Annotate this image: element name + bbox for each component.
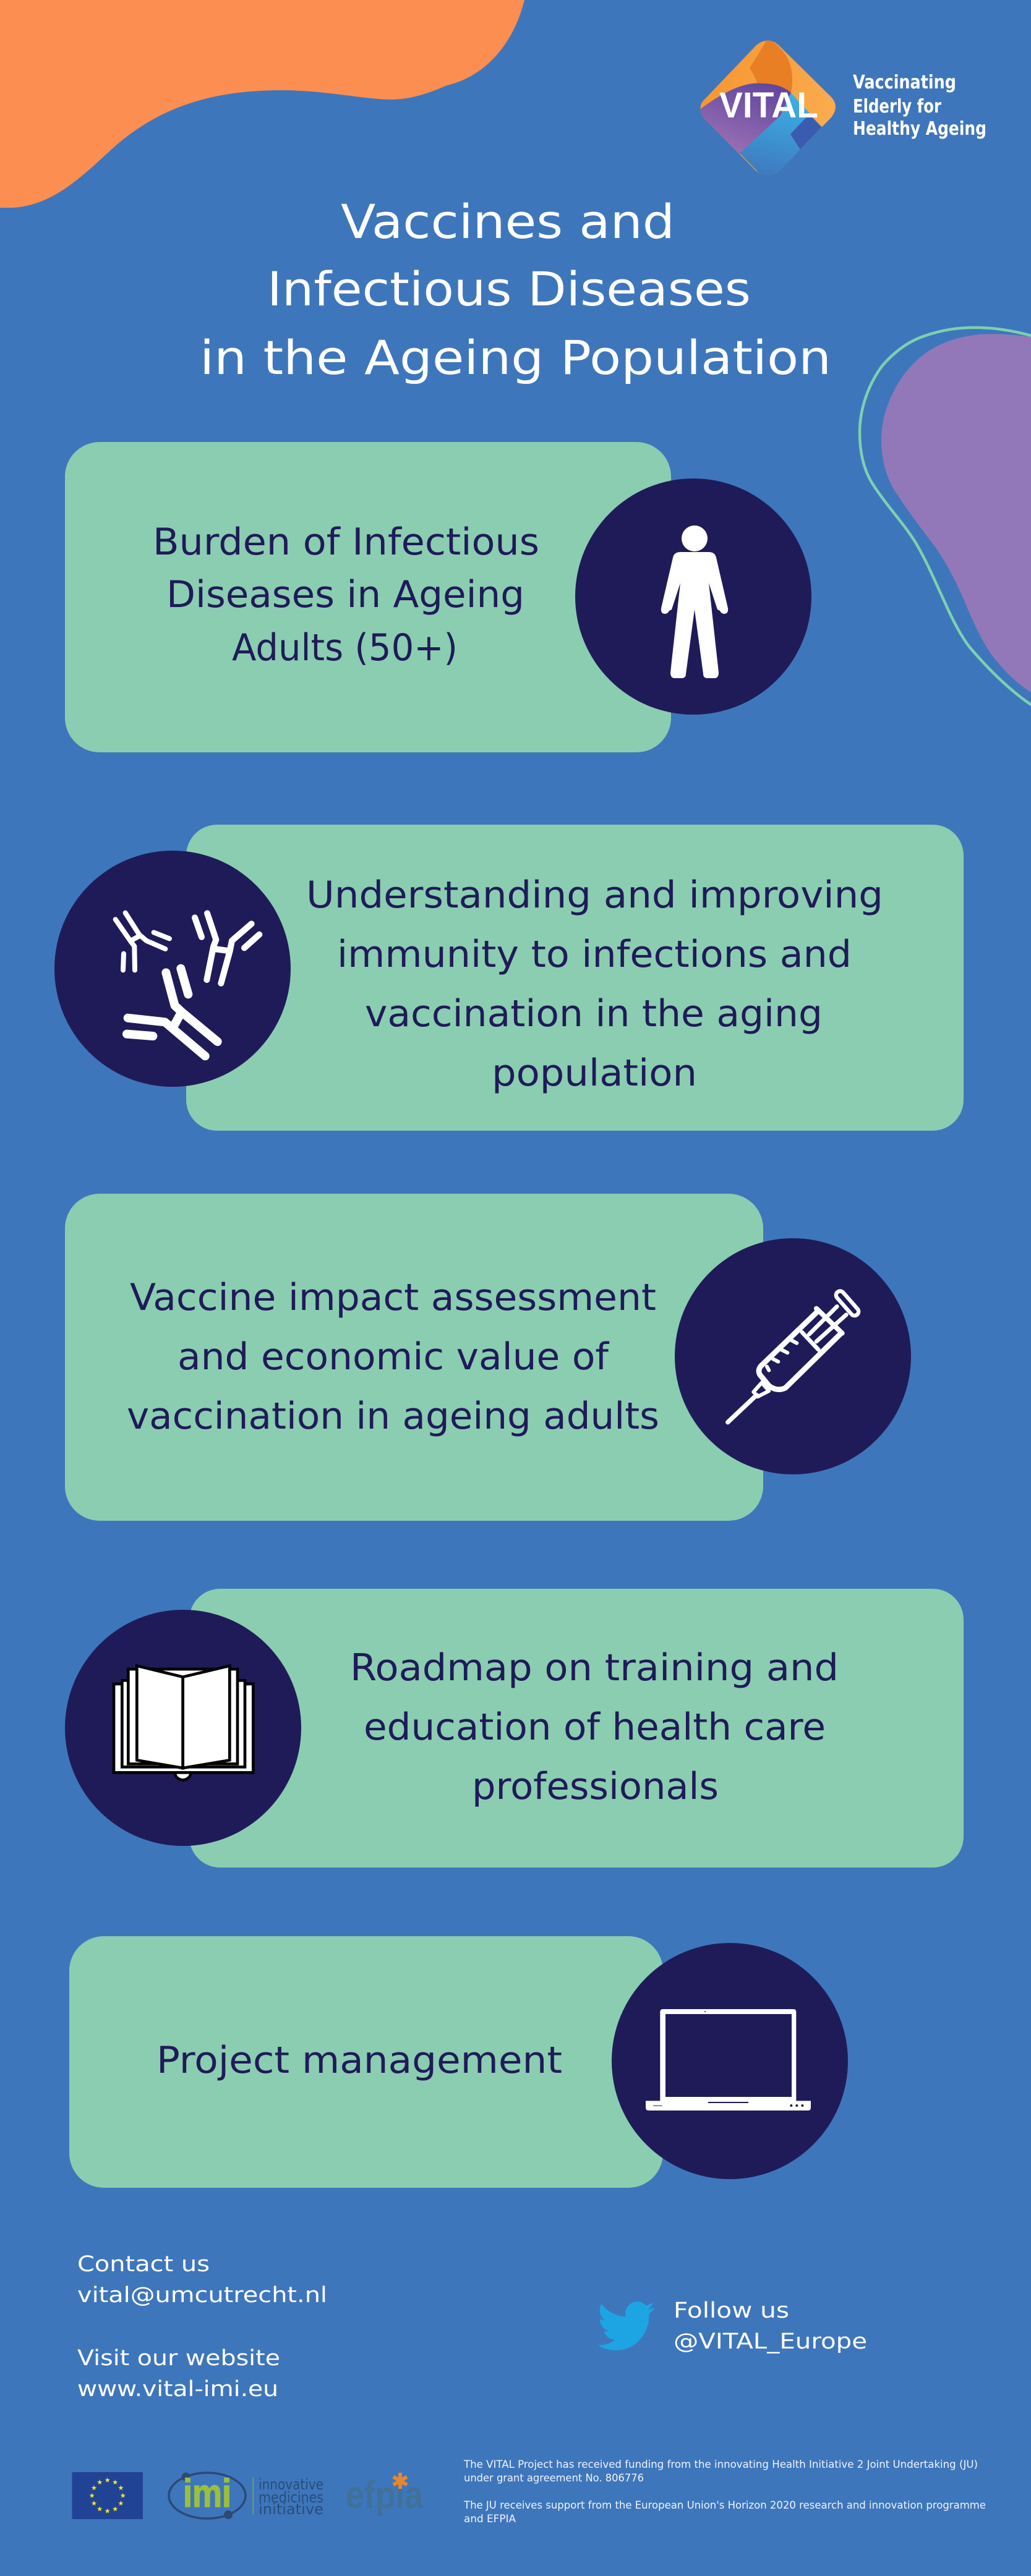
icon: antibodies [116,913,259,1056]
icon circle [675,1238,911,1474]
card text [306,874,883,1095]
icon circle [612,1943,848,2179]
card background [189,1589,964,1868]
card text [127,1276,659,1438]
logo: innovative medicines initiative: innovative [259,2476,323,2493]
funding statement: under grant agreement No. 806776 [464,2472,644,2485]
panel: project management [69,1936,848,2188]
card text [153,521,539,670]
card background [186,825,964,1131]
card text: immunity to infections and [337,933,852,976]
funding statement: and EFPIA [464,2513,516,2525]
icon: open book [114,1666,253,1780]
contact block [77,2252,327,2402]
contact block: Visit our website [77,2346,280,2371]
contact block: Contact us [77,2252,210,2277]
funding statement [463,2459,986,2525]
logo: innovative medicines initiative: imi [183,2471,231,2515]
title: in the Ageing Population [200,330,831,385]
follow us text [674,2298,867,2354]
card text: professionals [472,1765,719,1808]
logo tagline: Vaccinating [853,72,956,93]
card text: Project management [156,2039,562,2082]
card text: Understanding and improving [306,874,883,917]
decorative outline: green curve right [860,328,1031,705]
logo: EU flag [72,2472,143,2519]
panel: vaccine impact assessment [65,1194,911,1521]
card text: and economic value of [178,1335,610,1379]
logo: innovative medicines initiative [169,2471,323,2519]
panel: burden of infectious diseases [65,442,811,752]
card background [65,1194,763,1521]
contact block: vital@umcutrecht.nl [77,2283,327,2308]
logo: innovative medicines initiative: initiative [259,2501,323,2518]
logo mark [700,41,836,176]
panel: roadmap on training [65,1589,964,1868]
icon: syringe [728,1295,855,1422]
card text: Vaccine impact assessment [130,1276,656,1319]
decorative blob: orange top-left [0,0,524,208]
follow us text: @VITAL_Europe [674,2329,867,2354]
logo: efpia: efpia [346,2474,423,2517]
title: Infectious Diseases [267,261,751,317]
follow us text: Follow us [674,2298,789,2323]
contact block: www.vital-imi.eu [77,2377,278,2402]
logo: innovative medicines initiative: medicines [259,2489,323,2506]
decorative blob: purple right [881,334,1031,692]
card text: Adults (50+) [232,626,458,670]
logo tagline [853,72,986,140]
icon: laptop [646,2009,811,2111]
card background [65,442,671,752]
icon: twitter bird [597,2302,655,2350]
card text: population [492,1052,697,1095]
icon: person [661,525,728,678]
panel: understanding and improving immunity [54,825,964,1131]
icon circle [65,1610,301,1846]
logo wordmark: VITAL [719,85,818,125]
card text: vaccination in ageing adults [127,1395,659,1438]
icon circle [54,851,291,1087]
title [200,194,831,385]
funding statement: The JU receives support from the European Union's Horizon 2020 research and innovation programme [463,2499,986,2512]
card background [69,1936,663,2188]
icon circle [575,478,811,715]
funding statement: The VITAL Project has received funding from the innovating Health Initiative 2 Joint Undertaking (JU) [463,2459,978,2471]
logo: VITAL [700,41,985,176]
card text: Burden of Infectious [153,521,539,564]
card text: vaccination in the aging [365,992,823,1035]
card text: Roadmap on training and [350,1646,839,1690]
logo tagline: Elderly for [853,96,941,117]
card text: education of health care [364,1706,826,1749]
logo tagline: Healthy Ageing [853,118,986,140]
title: Vaccines and [341,194,675,249]
card text: Diseases in Ageing [166,573,524,616]
card text [350,1646,839,1808]
